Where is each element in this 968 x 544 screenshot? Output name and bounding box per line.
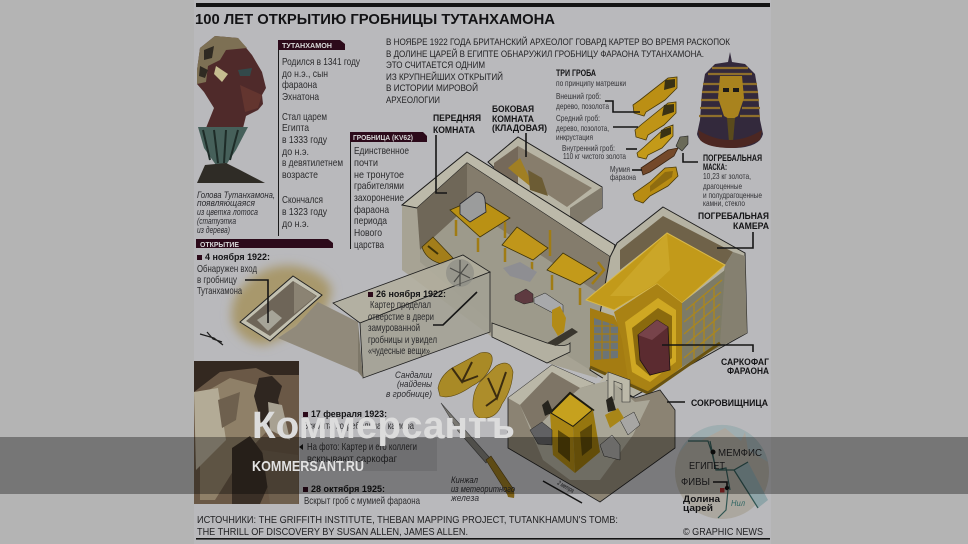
timeline: 26 November 1922 [368,289,446,357]
icon: three coffins, mummy and case [633,77,688,203]
illustration: sand and entrance [232,266,332,345]
intro text [386,36,730,106]
map labels: Долина [683,494,721,505]
label: treasury: СОКРОВИЩНИЦА [691,398,768,409]
icon: chests [515,289,563,313]
map labels: МЕМФИС [718,448,762,459]
intro text: В НОЯБРЕ 1922 ГОДА БРИТАНСКИЙ АРХЕОЛОГ ГОВАРД КАРТЕР ВО ВРЕМЯ РАСКОПОК [386,36,730,48]
caption: head: Голова Тутанхамона, [197,190,275,201]
icon: stones [503,262,537,282]
coffin labels: дерево, позолота, [556,123,609,133]
map labels: ФИВЫ [681,477,710,488]
caption: head [197,190,275,236]
label: annex: КОМНАТА [492,114,534,125]
timeline: 28 October 1925 [303,484,420,507]
intro text: В ИСТОРИИ МИРОВОЙ [386,82,478,94]
label: sarcophagus: САРКОФАГ [721,357,770,368]
caption: dagger: из метеоритного [451,484,515,495]
caption: dagger: железа [450,493,479,504]
label: burial mask: ПОГРЕБАЛЬНАЯ [703,153,762,164]
caption: dagger: Кинжал [451,475,479,486]
label: opening heading: ОТКРЫТИЕ [200,240,239,249]
panel: Tutankhamun facts: до н.э. [282,146,309,158]
caption: head: (статуэтка [197,216,236,227]
illustration: dagger [441,403,514,498]
coffin labels: Внутренний гроб: [562,143,615,153]
label: opening heading [196,239,333,249]
panel: Tutankhamun facts: в девятилетнем [282,157,343,169]
caption: dagger [450,475,515,504]
watermark logo: Коммерсантъ [252,405,515,447]
coffin labels: дерево, позолота [556,101,609,111]
photo: Carter and colleagues [194,361,299,504]
shrine right face [682,270,725,367]
coffin labels: Средний гроб: [556,113,600,123]
coffin labels: инкрустация [556,132,593,142]
timeline: 17 February 1923: 17 февраля 1923: [311,409,387,420]
icon: couch 3 [547,253,604,305]
timeline: 26 November 1922: замурованной [368,322,420,334]
panel: Tutankhamun facts [278,40,361,236]
panel: Tutankhamun facts: до н.э., сын [282,68,328,80]
panel: tomb KV62 facts: грабителями [354,180,404,192]
label: burial chamber: ПОГРЕБАЛЬНАЯ [698,211,769,222]
photo caption: На фото: Картер и его коллеги [307,441,417,453]
timeline: 4 November 1922: Обнаружен вход [197,263,257,275]
photo: head of Tutankhamun [197,36,266,183]
sources: THE THRILL OF DISCOVERY BY SUSAN ALLEN, JAMES ALLEN. [197,527,468,538]
icon: burial mask [697,52,763,148]
coffin labels: ТРИ ГРОБА [556,68,596,78]
timeline: 28 October 1925: Вскрыт гроб с мумией фараона [304,495,420,507]
scale bar: 2 метра [555,479,575,495]
timeline: 26 November 1922: 26 ноября 1922: [376,289,446,300]
icon: chariot [422,237,453,264]
label: burial mask: драгоценные [703,181,742,191]
watermark url: KOMMERSANT.RU [252,458,364,475]
icon: guardian statue [547,306,578,346]
panel: Tutankhamun facts: Родился в 1341 году [282,56,361,68]
label: annex: БОКОВАЯ [492,104,534,115]
label: sarcophagus: ФАРАОНА [727,366,769,377]
panel: tomb KV62 facts: фараона [354,204,389,216]
caption: head: из дерева) [197,225,230,236]
panel: Tutankhamun facts: Скончался [282,194,323,206]
panel: tomb KV62 facts: почти [354,157,378,169]
timeline: 17 February 1923 [303,409,414,432]
coffin labels: Мумия [610,164,630,174]
panel: tomb KV62 facts [350,132,427,251]
intro text: АРХЕОЛОГИИ [386,95,440,106]
illustration: antechamber [402,152,615,378]
caption: head: из цветка лотоса [197,207,258,218]
caption: sandals: в гробнице) [386,389,432,400]
leader lines [245,101,753,402]
watermark band [0,437,968,494]
timeline: 26 November 1922: Картер проделал [370,299,431,311]
panel: Tutankhamun facts: Египта [282,122,309,134]
panel: Tutankhamun facts: возрасте [282,169,318,181]
icon: door seal [446,259,474,287]
caption: sandals [386,370,433,400]
timeline: 4 November 1922: в гробницу [197,274,238,286]
panel: tomb KV62 facts: Нового [354,227,382,239]
timeline: 4 November 1922 [197,252,270,297]
illustration: entrance corridor [278,255,490,378]
coffin labels: Внешний гроб: [556,91,601,101]
sources: ИСТОЧНИКИ: THE GRIFFITH INSTITUTE, THEBAN MAPPING PROJECT, TUTANKHAMUN'S TOMB: [197,515,618,526]
timeline: 26 November 1922: гробницы и увидел [368,334,437,346]
map labels: Нил [731,499,745,508]
label: antechamber [433,113,481,136]
shrine nested frames [614,284,682,393]
label: burial mask [703,153,762,208]
title: 100 ЛЕТ ОТКРЫТИЮ ГРОБНИЦЫ ТУТАНХАМОНА [195,11,555,28]
caption: sandals: (найдены [397,379,432,390]
photo caption: вскрывают саркофаг [307,453,397,465]
timeline: 28 October 1925: 28 октября 1925: [311,484,385,495]
coffin labels [556,68,636,182]
credit: © GRAPHIC NEWS [683,527,763,538]
label: burial chamber: КАМЕРА [733,221,769,232]
map labels: царей [683,503,713,514]
panel: Tutankhamun facts: Стал царем [282,111,327,123]
illustration: sandals [438,352,513,418]
label: annex: (КЛАДОВАЯ) [492,123,547,134]
panel: Tutankhamun facts: до н.э. [282,218,309,230]
coffin labels: фараона [610,172,636,182]
illustration: annex room [488,137,602,232]
panel: tomb KV62 facts: Единственное [354,145,409,157]
shrine top [586,233,725,310]
photo caption [299,438,437,471]
label: burial mask: 10,23 кг золота, [703,171,751,181]
label: annex [492,104,547,134]
timeline: 4 November 1922: Тутанхамона [197,285,242,297]
panel: tomb KV62 facts: периода [354,215,387,227]
icon: couch 2 [502,227,550,276]
top rule [196,3,770,7]
panel: Tutankhamun facts: Эхнатона [282,91,319,103]
intro text: ЭТО СЧИТАЕТСЯ ОДНИМ [386,60,485,71]
panel: tomb KV62 facts: царства [354,239,384,251]
label: burial mask: МАСКА: [703,162,727,173]
timeline: 17 February 1923: Вскрыта погребальная камера [303,420,414,432]
label: burial mask: и полудрагоценные [703,190,762,200]
illustration: burial chamber [586,207,747,397]
map: Egypt [675,425,769,519]
timeline: 26 November 1922: отверстие в двери [368,311,434,323]
sources [197,515,618,538]
panel: Tutankhamun facts: фараона [282,79,317,91]
panel: tomb KV62 facts: захоронение [354,192,404,204]
coffin labels: 110 кг чистого золота [563,151,626,161]
label: antechamber: ПЕРЕДНЯЯ [433,113,481,124]
label: burial mask: камни, стекло [703,198,745,208]
label: sarcophagus [721,357,770,377]
intro text: В ДОЛИНЕ ЦАРЕЙ В ЕГИПТЕ ОБНАРУЖИЛ ГРОБНИЦУ ФАРАОНА ТУТАНХАМОНА. [386,48,704,60]
shrine left face [590,308,648,393]
map labels [681,448,762,514]
coffin labels: по принципу матрешки [556,78,626,88]
panel: tomb KV62 facts: не тронутое [354,169,404,181]
timeline: 4 November 1922: 4 ноября 1922: [205,252,270,263]
scale bar [543,479,582,503]
sarcophagus [638,320,670,375]
heading bar: Tutankhamun [278,40,345,50]
timeline: 26 November 1922: «чудесные вещи» [368,345,430,357]
illustration: treasury [508,365,675,502]
shrine in treasury [550,393,600,473]
label: antechamber: КОМНАТА [433,125,475,136]
caption: head: появляющаяся [197,198,255,209]
intro text: ИЗ КРУПНЕЙШИХ ОТКРЫТИЙ [386,71,503,83]
icon: mark [200,332,223,345]
heading bar: tomb: ГРОБНИЦА (KV62) [353,133,413,142]
panel: Tutankhamun facts: в 1333 году [282,134,328,146]
boxes in treasury [530,396,640,460]
map labels: ЕГИПЕТ [689,461,725,472]
icon: couch 1 with chest [450,192,510,252]
panel: Tutankhamun facts: в 1323 году [282,206,328,218]
label: burial chamber [698,211,769,232]
heading bar: Tutankhamun: ТУТАНХАМОН [282,41,332,50]
caption: sandals: Сандалии [395,370,433,381]
